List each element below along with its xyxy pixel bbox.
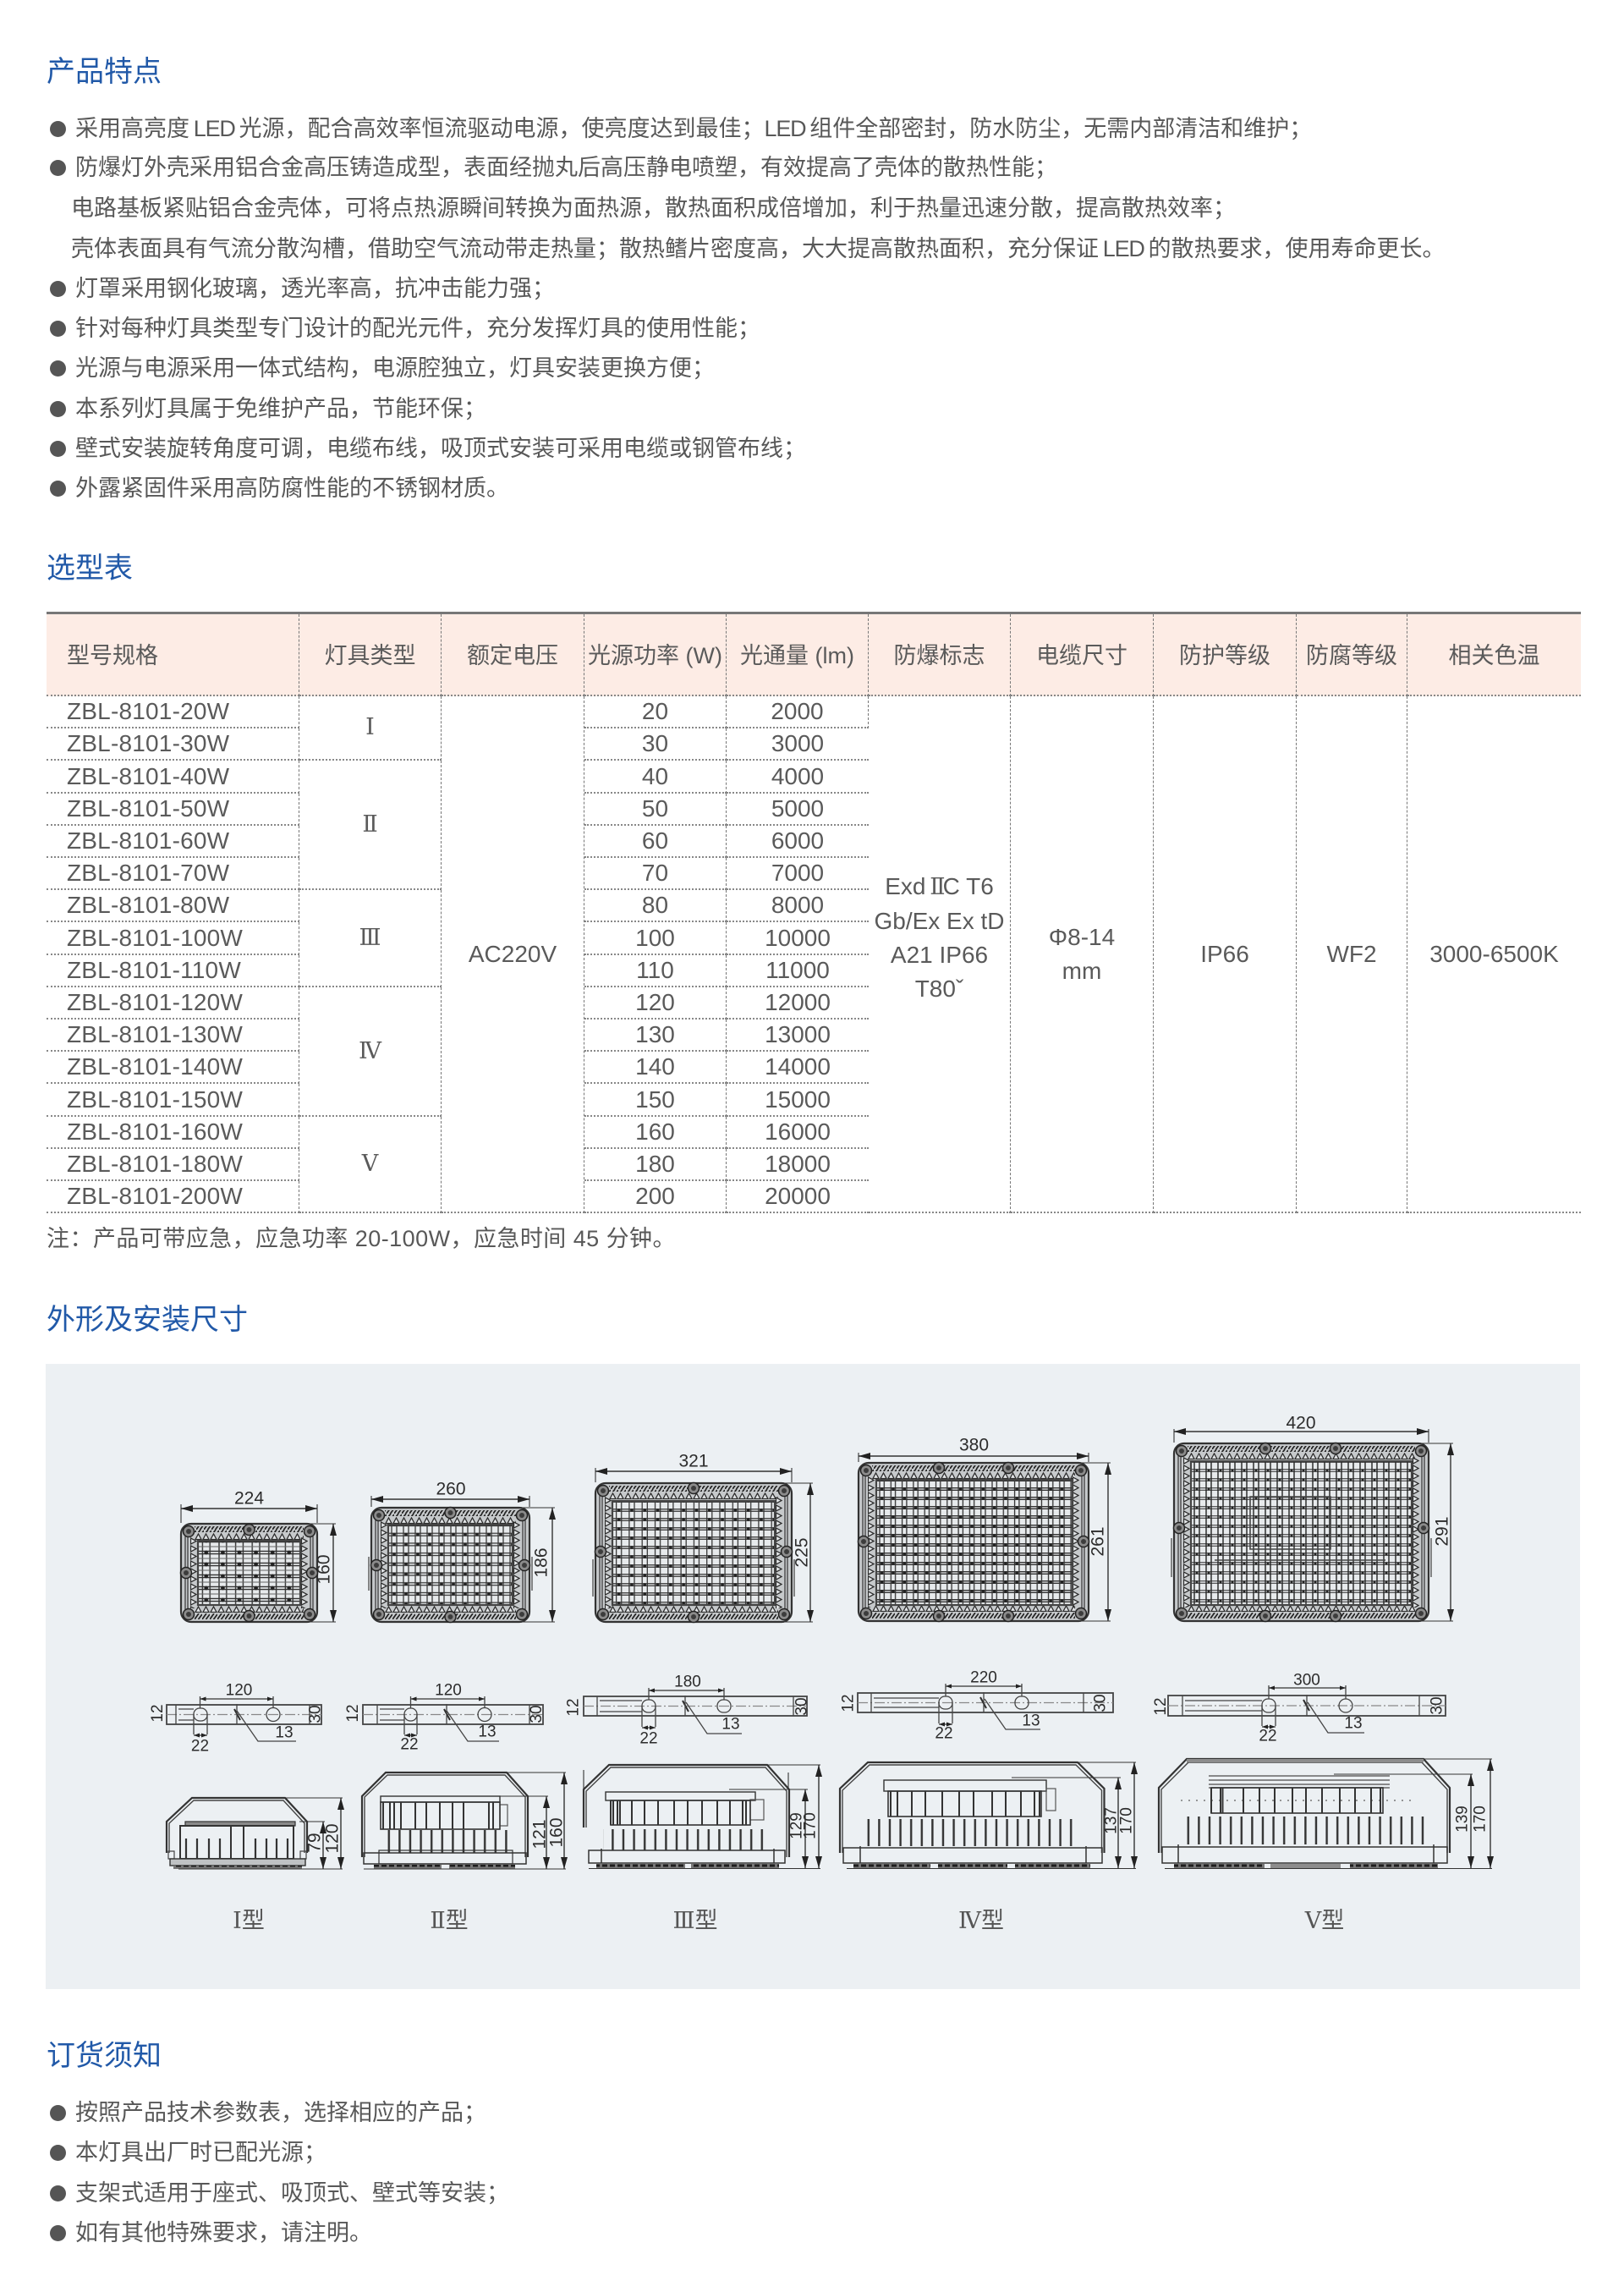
mounting bracket: type V: 30	[1428, 1696, 1446, 1715]
mounting bracket: type II: 22	[400, 1736, 419, 1753]
table: model selection: A21 IP66	[891, 942, 988, 968]
mounting bracket: type III: 13	[721, 1716, 740, 1733]
mounting bracket: type III: 12	[565, 1698, 582, 1717]
note 2: 本灯具出厂时已配光源；	[75, 2140, 326, 2165]
dimension: 261	[1079, 1463, 1111, 1621]
table: model selection: 灯具类型	[325, 643, 416, 668]
side view: type II lamp	[362, 1773, 528, 1869]
table: model selection: ZBL-8101-160W	[67, 1119, 243, 1145]
side view: type IV lamp	[840, 1762, 1105, 1868]
dimensions: 170 and 129: 129	[788, 1812, 805, 1839]
dimensions: 120 and 79: 120	[323, 1823, 342, 1854]
table: model selection: 电缆尺寸	[1036, 643, 1127, 668]
dimension: 224	[181, 1489, 317, 1523]
dimension: 186: 186	[531, 1547, 551, 1578]
bullet 5: 光源与电源采用一体式结构，电源腔独立，灯具安装更换方便；	[75, 355, 715, 381]
mounting bracket: type III: 180	[674, 1674, 701, 1690]
front view: type IV lamp	[858, 1462, 1089, 1621]
bullet 2 continued: 壳体表面具有气流分散沟槽，借助空气流动带走热量；散热鳍片密度高，大大提高散热面积，充分保证 LED 的散热要求，使用寿命更长。	[71, 236, 1446, 261]
heading: ordering notes: 订货须知	[47, 2040, 162, 2072]
mounting bracket: type I	[149, 1682, 325, 1755]
table: model selection: 5000	[771, 795, 824, 822]
table: model selection: 80	[642, 892, 668, 918]
table: model selection: ZBL-8101-80W	[67, 892, 229, 918]
dimension: 420: 420	[1286, 1413, 1316, 1433]
label: type II: Ⅱ型	[430, 1907, 469, 1934]
table: model selection: 光源功率 (W)	[588, 643, 722, 668]
dimensions: 170 and 139	[1165, 1759, 1492, 1868]
front view: type V lamp	[1171, 1443, 1431, 1621]
dimension: 260	[371, 1479, 529, 1507]
table: model selection: 11000	[765, 957, 830, 983]
table: model selection	[47, 612, 1581, 1213]
label: type IV: Ⅳ型	[958, 1907, 1004, 1934]
dimensions: 170 and 137: 170	[1118, 1807, 1135, 1834]
table: model selection: Ⅴ	[362, 1151, 378, 1177]
table: model selection: 18000	[765, 1151, 831, 1177]
dimension: 291	[1419, 1443, 1453, 1621]
mounting bracket: type III: 22	[639, 1729, 658, 1748]
dimension: 380	[859, 1435, 1089, 1462]
bullet 8: 外露紧固件采用高防腐性能的不锈钢材质。	[75, 475, 509, 501]
table: model selection: 光通量 (lm)	[740, 643, 854, 668]
mounting bracket: type V: 300	[1293, 1672, 1320, 1689]
table: model selection: Ⅲ	[359, 924, 381, 951]
front view: type I lamp	[181, 1524, 318, 1622]
dimension: 225: 225	[792, 1537, 812, 1568]
dimension: 321: 321	[678, 1452, 709, 1470]
table: model selection: 20000	[765, 1183, 831, 1209]
heading: product features: 产品特点	[47, 56, 162, 88]
table: model selection: ZBL-8101-30W	[67, 730, 229, 756]
table: model selection: 型号规格	[67, 643, 158, 668]
bullet 2 continued: 电路基板紧贴铝合金壳体，可将点热源瞬间转换为面热源，散热面积成倍增加，利于热量迅速分散，提高散热效率；	[71, 195, 1236, 221]
side view: type I lamp	[167, 1798, 307, 1869]
dimensions: 170 and 129: 170	[802, 1812, 819, 1839]
mounting bracket: type II: 12	[344, 1704, 362, 1723]
table: model selection: 10000	[765, 924, 831, 951]
label: type III: Ⅲ型	[672, 1907, 718, 1934]
mounting bracket: type IV: 12	[839, 1694, 858, 1712]
table: model selection: Φ8-14	[1049, 924, 1115, 949]
table: model selection: ZBL-8101-40W	[67, 763, 229, 789]
dimensions: 170 and 137	[847, 1762, 1136, 1868]
dimensions: 120 and 79	[178, 1798, 343, 1869]
table: model selection: 110	[636, 957, 674, 983]
mounting bracket: type IV: 22	[935, 1724, 953, 1743]
table: model selection: ZBL-8101-70W	[67, 860, 229, 886]
table: model selection: WF2	[1326, 941, 1377, 966]
bullet 3: 灯罩采用钢化玻璃，透光率高，抗冲击能力强；	[75, 276, 555, 301]
table: model selection: ZBL-8101-150W	[67, 1086, 243, 1112]
table: model selection: 防爆标志	[893, 643, 985, 668]
table: model selection: ZBL-8101-50W	[67, 795, 229, 822]
mounting bracket: type V: 13	[1344, 1714, 1363, 1733]
mounting bracket: type II: 13	[478, 1723, 497, 1741]
table: model selection: 20	[642, 698, 668, 724]
dimension: 261: 261	[1088, 1526, 1108, 1557]
table: model selection: ZBL-8101-20W	[67, 698, 229, 724]
dimension: 186	[521, 1508, 555, 1622]
mounting bracket: type IV: 220	[970, 1668, 997, 1687]
table: model selection: 8000	[771, 892, 824, 918]
table: model selection: ZBL-8101-140W	[67, 1053, 243, 1080]
table: model selection: 100	[635, 924, 675, 951]
mounting bracket: type I: 30	[306, 1705, 325, 1723]
label: type V: Ⅴ型	[1304, 1907, 1344, 1934]
dimensions: 170 and 139: 170	[1472, 1806, 1489, 1833]
table: model selection: T80ˇ	[915, 976, 963, 1002]
dimensions: 170 and 137: 137	[1103, 1807, 1120, 1834]
table: model selection: 12000	[765, 989, 831, 1015]
dimension: 291: 291	[1433, 1516, 1451, 1547]
table: model selection: 3000-6500K	[1429, 941, 1559, 966]
front view: type II lamp	[369, 1508, 532, 1623]
table: model selection: mm	[1062, 958, 1101, 983]
table: model selection: ZBL-8101-200W	[67, 1183, 243, 1209]
table: model selection: ZBL-8101-120W	[67, 989, 243, 1015]
dimension: 260: 260	[436, 1479, 466, 1499]
mounting bracket: type V: 12	[1152, 1697, 1170, 1716]
table: model selection: ZBL-8101-180W	[67, 1151, 243, 1177]
table: model selection: Ⅳ	[359, 1037, 381, 1064]
table: model selection: 15000	[765, 1086, 831, 1112]
dimension: 420	[1174, 1413, 1429, 1443]
dimension: 321	[595, 1452, 792, 1482]
dimensions: 170 and 129	[589, 1765, 820, 1868]
dimensions: 160 and 121: 121	[529, 1819, 550, 1850]
heading: dimensions: 外形及安装尺寸	[47, 1304, 248, 1336]
mounting bracket: type III	[565, 1674, 810, 1748]
table: model selection: 180	[635, 1151, 675, 1177]
panel: dimension drawings	[46, 1364, 1580, 1989]
label: type I: Ⅰ型	[233, 1907, 265, 1934]
mounting bracket: type II: 30	[528, 1705, 546, 1723]
table: model selection: 2000	[771, 698, 824, 724]
note 4: 如有其他特殊要求，请注明。	[75, 2220, 372, 2245]
table: model selection: 14000	[765, 1053, 831, 1080]
mounting bracket: type V: 22	[1259, 1728, 1277, 1745]
heading: selection table: 选型表	[47, 552, 133, 585]
mounting bracket: type IV: 13	[1022, 1712, 1040, 1729]
table: model selection: 额定电压	[467, 643, 558, 668]
table: model selection: 130	[635, 1021, 675, 1047]
table: model selection: AC220V	[469, 941, 557, 966]
table: model selection: Gb/Ex Ex tD	[874, 908, 1005, 934]
dimensions: 160 and 121	[364, 1773, 567, 1869]
mounting bracket: type II	[344, 1682, 546, 1753]
text block: ordering notes list	[50, 2100, 509, 2245]
mounting bracket: type I: 13	[275, 1724, 294, 1741]
note 1: 按照产品技术参数表，选择相应的产品；	[75, 2100, 486, 2125]
mounting bracket: type IV: 30	[1091, 1694, 1110, 1712]
bullet 1: 采用高亮度 LED 光源，配合高效率恒流驱动电源，使亮度达到最佳；LED 组件全部密封，防水防尘，无需内部清洁和维护；	[75, 116, 1312, 141]
table: model selection: 150	[635, 1086, 675, 1112]
table: model selection: 防护等级	[1179, 643, 1270, 668]
table: model selection: 30	[642, 730, 668, 756]
table: model selection: 140	[635, 1053, 675, 1080]
mounting bracket: type II: 120	[435, 1682, 462, 1699]
bullet 4: 针对每种灯具类型专门设计的配光元件，充分发挥灯具的使用性能；	[75, 316, 760, 341]
table: model selection: Exd ⅡC T6	[885, 873, 994, 900]
table: model selection: 50	[642, 795, 668, 822]
table: model selection: 6000	[771, 827, 824, 854]
mounting bracket: type V	[1152, 1672, 1446, 1745]
mounting bracket: type I: 22	[191, 1738, 209, 1755]
table: model selection: 40	[642, 763, 668, 789]
note 3: 支架式适用于座式、吸顶式、壁式等安装；	[75, 2180, 509, 2206]
table: model selection: 7000	[771, 860, 824, 886]
dimension: 160: 160	[315, 1554, 333, 1585]
mounting bracket: type III: 30	[793, 1697, 810, 1716]
table: model selection: ZBL-8101-100W	[67, 924, 243, 951]
table: model selection: ZBL-8101-60W	[67, 827, 229, 854]
table: model selection: 200	[635, 1183, 675, 1209]
mounting bracket: type I: 120	[226, 1682, 252, 1699]
table: model selection: Ⅰ	[365, 714, 375, 740]
dimensions: 120 and 79: 79	[304, 1833, 325, 1853]
dimensions: 170 and 139: 139	[1453, 1806, 1472, 1833]
bullet 7: 壁式安装旋转角度可调，电缆布线，吸顶式安装可采用电缆或钢管布线；	[75, 436, 806, 461]
table: model selection: 160	[635, 1119, 675, 1145]
mounting bracket: type IV	[839, 1668, 1113, 1743]
dimension: 224: 224	[234, 1489, 264, 1508]
dimension: 160	[309, 1524, 336, 1622]
note under table: 注：产品可带应急，应急功率 20-100W，应急时间 45 分钟。	[47, 1226, 676, 1251]
dimensions: 160 and 121: 160	[546, 1817, 567, 1848]
table: model selection: 120	[635, 989, 675, 1015]
side view: type III lamp	[584, 1765, 789, 1868]
table: model selection: IP66	[1200, 941, 1249, 966]
front view: type III lamp	[593, 1482, 794, 1623]
table: model selection: ZBL-8101-130W	[67, 1021, 243, 1047]
dimension: 380: 380	[959, 1435, 989, 1455]
side view: type V lamp	[1159, 1759, 1450, 1868]
text block: product features list	[50, 116, 1446, 501]
table: model selection: ZBL-8101-110W	[67, 957, 241, 983]
table: model selection: 防腐等级	[1306, 643, 1397, 668]
dimension: 225	[782, 1483, 813, 1622]
mounting bracket: type I: 12	[149, 1704, 167, 1723]
table: model selection: 13000	[765, 1021, 831, 1047]
table: model selection: Ⅱ	[362, 811, 378, 838]
table: model selection: 16000	[765, 1119, 831, 1145]
bullet 2: 防爆灯外壳采用铝合金高压铸造成型，表面经抛丸后高压静电喷塑，有效提高了壳体的散热性能；	[75, 155, 1057, 180]
table: model selection: 4000	[771, 763, 824, 789]
table: model selection: 相关色温	[1448, 643, 1539, 668]
table: model selection: 3000	[771, 730, 824, 756]
table: model selection: 70	[642, 860, 668, 886]
bullet 6: 本系列灯具属于免维护产品，节能环保；	[75, 396, 486, 421]
table: model selection: 60	[642, 827, 668, 854]
